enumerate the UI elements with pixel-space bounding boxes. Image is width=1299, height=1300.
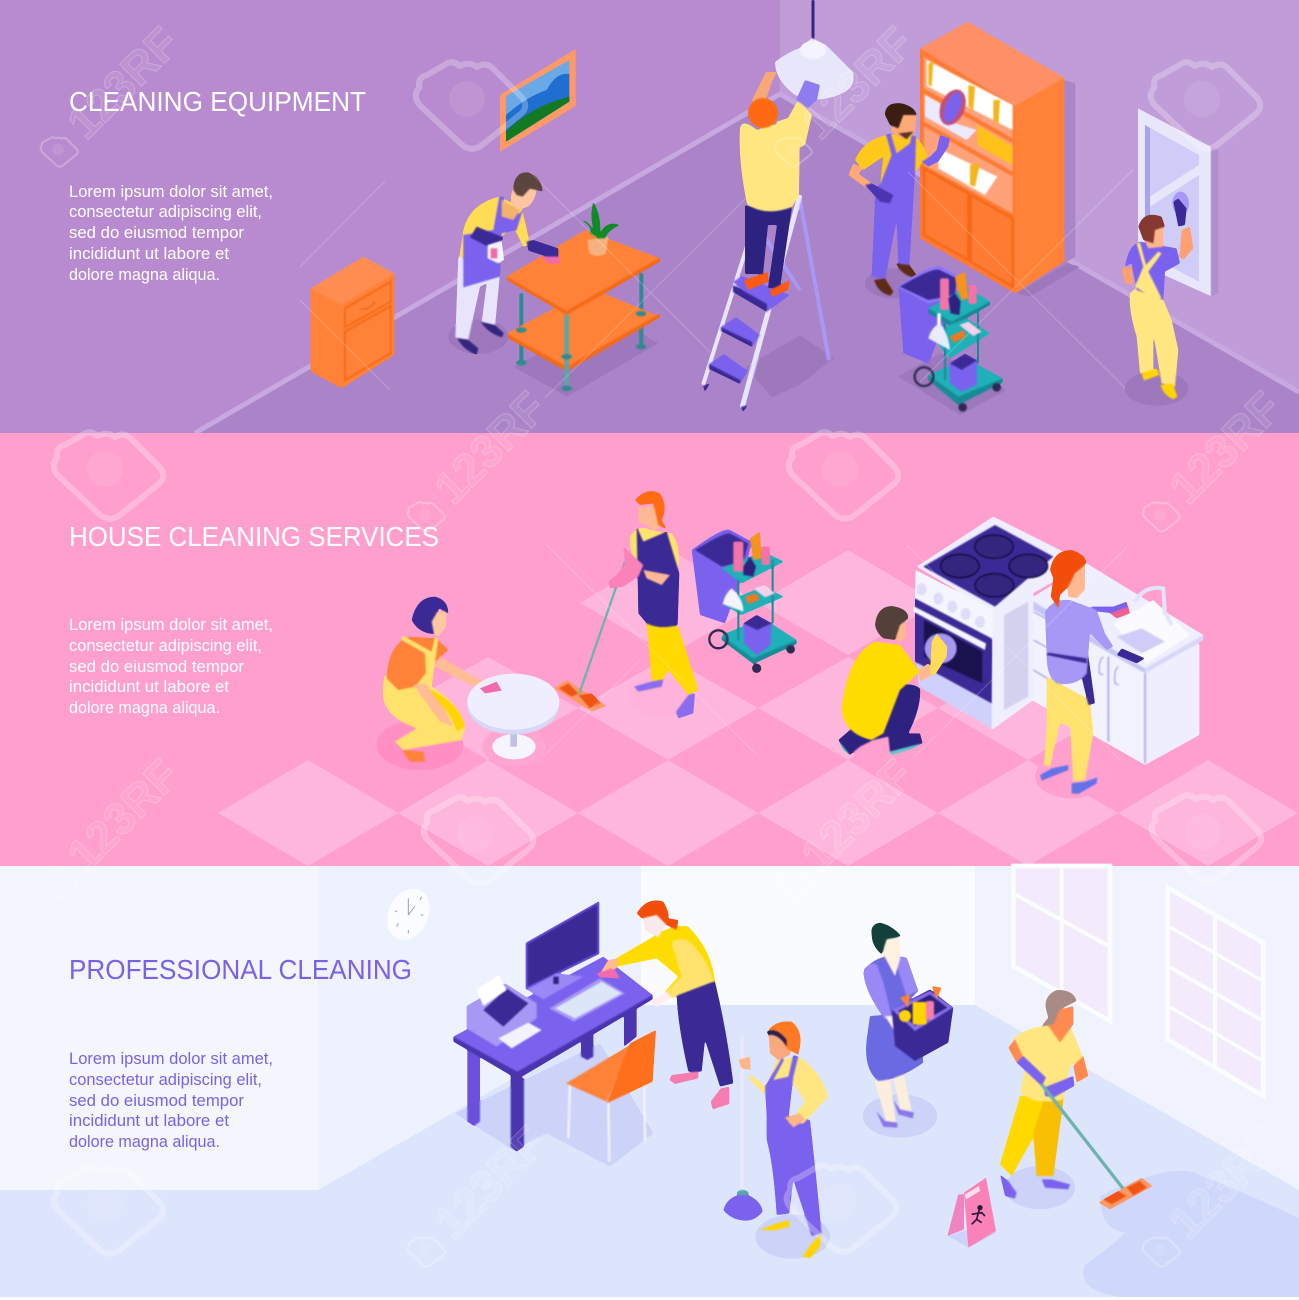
text block: house cleaning services xyxy=(69,616,273,717)
text block: house cleaning services: dolore magna aliqua. xyxy=(69,699,220,717)
text block: house cleaning services: incididunt ut labore et xyxy=(69,678,229,696)
text block: cleaning equipment xyxy=(69,183,273,284)
person: bearded man in overalls xyxy=(848,103,950,298)
text block: cleaning equipment: dolore magna aliqua. xyxy=(69,266,220,284)
puddle xyxy=(1083,1171,1299,1297)
icon: wall picture xyxy=(500,49,576,152)
text block: professional cleaning: consectetur adipiscing elit, xyxy=(69,1071,262,1089)
person: man spraying table xyxy=(448,172,561,355)
person: woman wiping computer desk xyxy=(597,901,733,1109)
person: woman mopping floor xyxy=(1000,990,1153,1209)
panel: cleaning equipment xyxy=(0,0,1299,433)
heading: cleaning equipment: CLEANING EQUIPMENT xyxy=(69,86,366,117)
icon: wall clock xyxy=(379,882,438,947)
text block: cleaning equipment: Lorem ipsum dolor sit amet, xyxy=(69,183,273,201)
text block: cleaning equipment: sed do eiusmod tempor xyxy=(69,224,245,242)
person: man on ladder dusting lamp xyxy=(740,72,820,297)
icon: ceiling lamp xyxy=(775,0,854,99)
text block: professional cleaning: Lorem ipsum dolor sit amet, xyxy=(69,1050,273,1068)
heading: house cleaning services: HOUSE CLEANING SERVICES xyxy=(69,521,439,552)
icon: cleaning trolley xyxy=(897,266,1007,415)
icon: orange cabinet xyxy=(311,257,394,388)
icon: windows xyxy=(1013,866,1263,1096)
text block: professional cleaning xyxy=(69,1050,273,1151)
text block: cleaning equipment: consectetur adipiscing elit, xyxy=(69,203,262,221)
orange table with plant xyxy=(507,202,660,397)
text block: house cleaning services: sed do eiusmod tempor xyxy=(69,658,245,676)
person: worker washing window xyxy=(1122,198,1193,406)
icon: stove and kitchen counter xyxy=(913,517,1203,765)
text block: professional cleaning: sed do eiusmod tempor xyxy=(69,1092,245,1110)
icon: cleaning trolley xyxy=(692,530,797,673)
text block: professional cleaning: dolore magna aliqua. xyxy=(69,1133,220,1151)
icon: orange bookshelf xyxy=(920,22,1080,297)
panel: house cleaning services xyxy=(0,433,1299,866)
person: man cleaning oven xyxy=(838,606,947,765)
text block: house cleaning services: consectetur adipiscing elit, xyxy=(69,637,262,655)
person: woman washing sink xyxy=(1035,550,1145,798)
icon: window xyxy=(1138,108,1218,296)
person: woman wiping round table xyxy=(377,597,495,770)
person: supervisor holding basket xyxy=(863,923,953,1138)
text block: cleaning equipment: incididunt ut labore et xyxy=(69,245,229,263)
heading: professional cleaning: PROFESSIONAL CLEANING xyxy=(69,954,412,985)
person: woman with mop xyxy=(723,1021,830,1259)
icon: computer desk with printer and chair xyxy=(453,903,656,1167)
person: woman mopping xyxy=(554,491,698,718)
text block: house cleaning services: Lorem ipsum dolor sit amet, xyxy=(69,616,273,634)
icon: step ladder xyxy=(703,195,835,412)
panel: professional cleaning xyxy=(0,866,1299,1300)
text block: professional cleaning: incididunt ut labore et xyxy=(69,1112,229,1130)
icon: round table xyxy=(467,674,559,767)
icon: wet floor sign xyxy=(947,1178,997,1248)
